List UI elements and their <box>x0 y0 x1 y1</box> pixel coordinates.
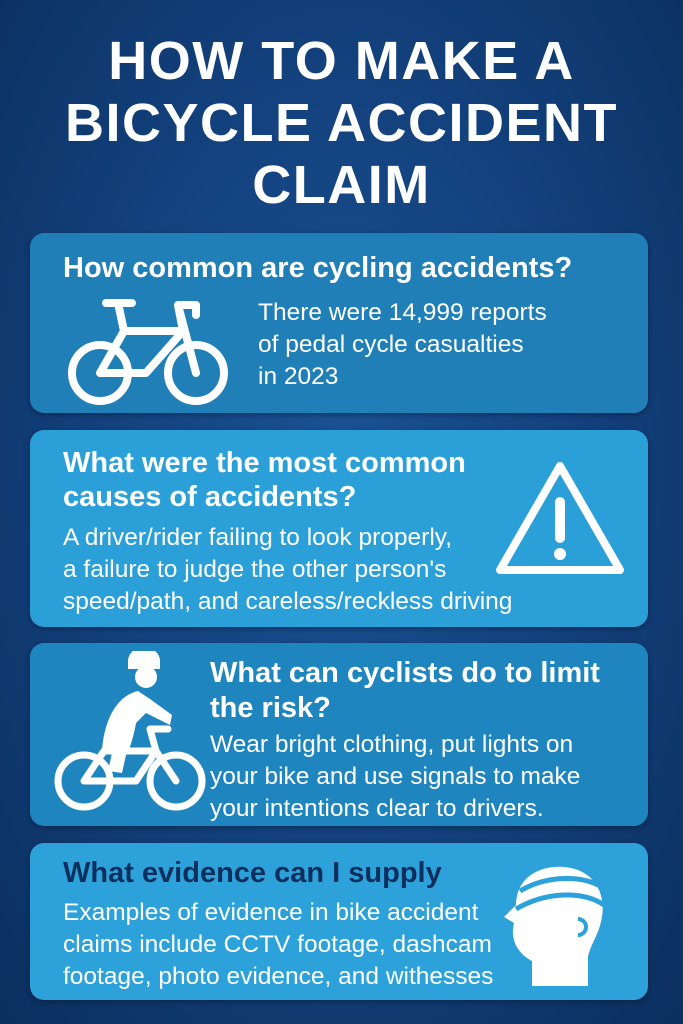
heading: How common are cycling accidents? <box>63 252 572 284</box>
title: HOW TO MAKE A <box>108 31 575 91</box>
icon: head with bandage <box>504 866 603 986</box>
heading: What evidence can I supply <box>63 857 442 889</box>
body text: in 2023 <box>258 363 338 390</box>
body text: There were 14,999 reports <box>258 299 547 326</box>
icon: bicycle <box>68 299 228 405</box>
panel: causes <box>30 430 648 627</box>
body text: of pedal cycle casualties <box>258 331 524 358</box>
body text: your intentions clear to drivers. <box>210 795 544 822</box>
body text <box>258 299 547 390</box>
body text: A driver/rider failing to look properly, <box>63 524 452 551</box>
title: BICYCLE ACCIDENT <box>65 93 618 153</box>
heading: the risk? <box>210 692 331 724</box>
title <box>65 31 618 215</box>
body text: Examples of evidence in bike accident <box>63 899 478 926</box>
heading: What were the most common <box>63 447 466 479</box>
heading: What can cyclists do to limit <box>210 657 600 689</box>
body text: Wear bright clothing, put lights on <box>210 731 573 758</box>
body text <box>63 524 512 615</box>
body text: footage, photo evidence, and withesses <box>63 963 493 990</box>
icon: cyclist <box>54 651 206 810</box>
icon: warning triangle <box>496 462 624 574</box>
body text: speed/path, and careless/reckless driving <box>63 588 512 615</box>
heading <box>63 447 466 513</box>
heading <box>210 657 600 724</box>
heading: causes of accidents? <box>63 481 356 513</box>
body text: your bike and use signals to make <box>210 763 580 790</box>
panel: evidence <box>30 843 648 1000</box>
body text <box>63 899 493 990</box>
panel: how common <box>30 233 648 413</box>
body text: claims include CCTV footage, dashcam <box>63 931 492 958</box>
body text: a failure to judge the other person's <box>63 556 446 583</box>
panel: limit risk <box>30 643 648 826</box>
body text <box>210 731 580 822</box>
title: CLAIM <box>252 155 431 215</box>
